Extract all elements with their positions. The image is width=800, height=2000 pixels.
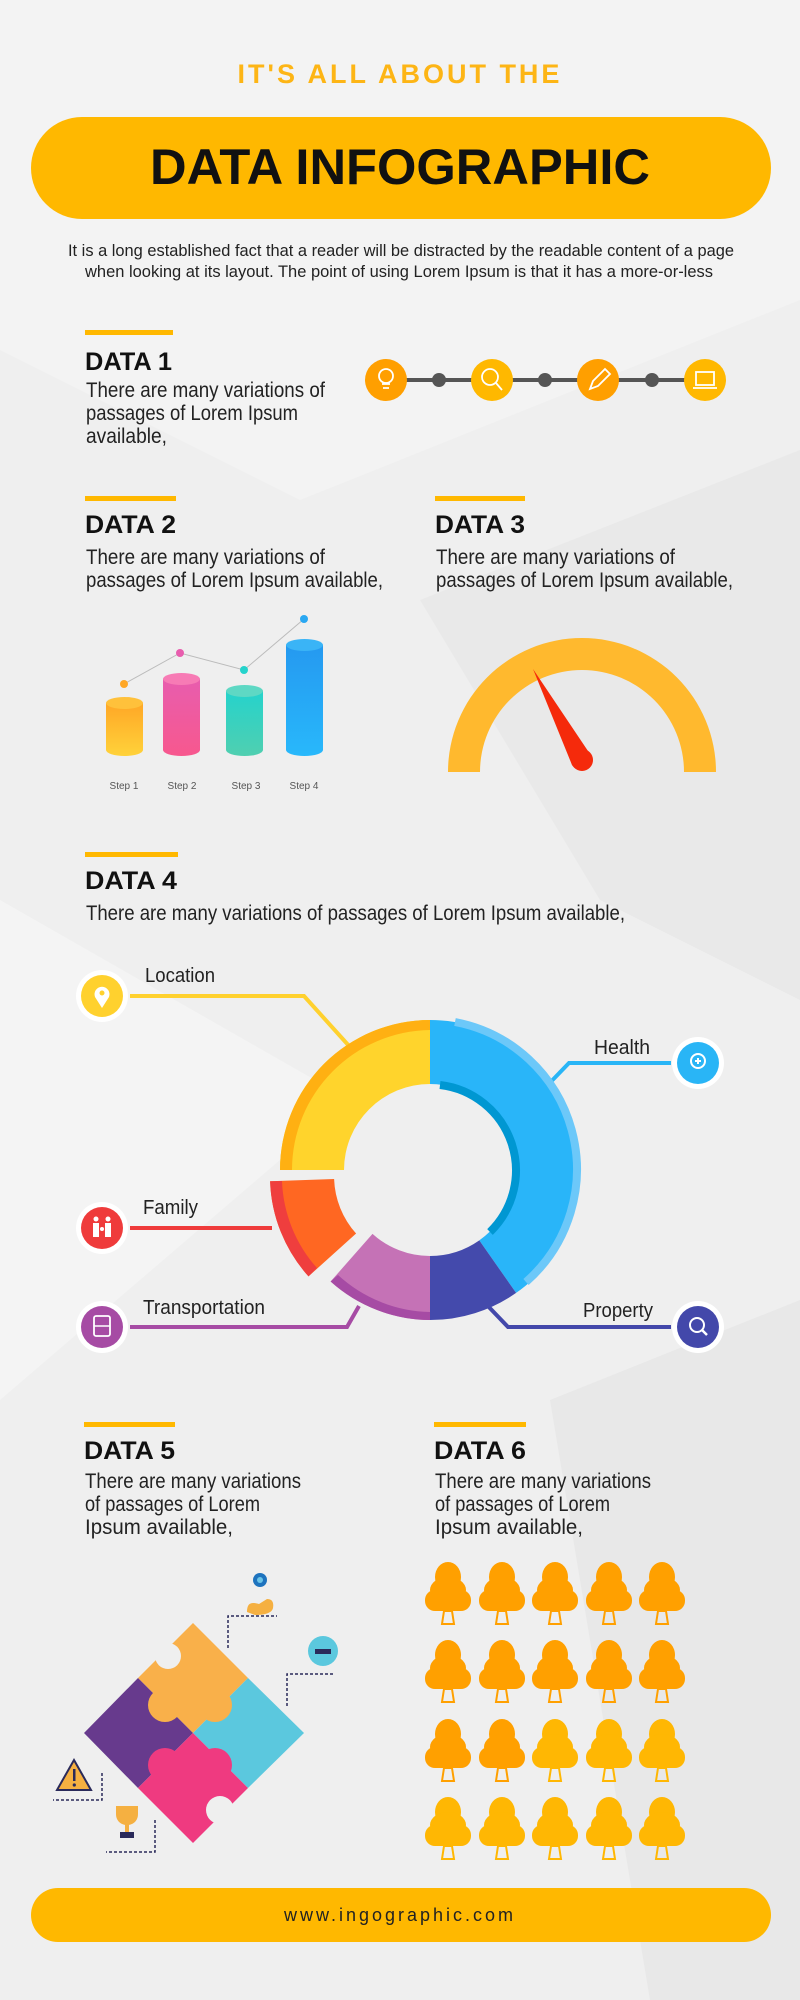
label: transportation <box>76 1297 265 1353</box>
panel: data 3: There are many variations of <box>436 546 675 569</box>
label: health <box>594 1037 724 1089</box>
title banner <box>31 117 771 219</box>
panel: data 2 <box>85 496 383 592</box>
label: family <box>76 1197 198 1254</box>
panel: data 1: There are many variations of <box>86 379 325 402</box>
bar chart: cylinders: Step 3 <box>232 781 261 792</box>
panel: data 6: of passages of Lorem <box>435 1493 610 1516</box>
panel: data 1: passages of Lorem Ipsum <box>86 402 298 425</box>
label: health: Health <box>594 1037 650 1059</box>
intro paragraph: It is a long established fact that a reader will be distracted by the readable content of a page <box>68 241 734 260</box>
panel: data 5: DATA 5 <box>84 1437 175 1465</box>
label: location: Location <box>145 965 215 987</box>
bar chart: cylinders: Step 4 <box>290 781 319 792</box>
label: transportation: Transportation <box>143 1297 265 1319</box>
panel: data 3: DATA 3 <box>435 511 525 539</box>
bar chart: cylinders: Step 2 <box>168 781 197 792</box>
panel: data 1: available, <box>86 425 167 448</box>
label: location <box>76 965 215 1022</box>
panel: data 6: Ipsum available, <box>435 1516 583 1539</box>
intro paragraph: when looking at its layout. The point of using Lorem Ipsum is that it has a more-or-less <box>84 262 713 281</box>
panel: data 2: DATA 2 <box>85 511 176 539</box>
panel: data 4: There are many variations of passages of Lorem Ipsum available, <box>86 902 625 925</box>
label: property: Property <box>583 1300 653 1322</box>
panel: data 6: There are many variations <box>435 1470 651 1493</box>
panel: data 6 <box>434 1422 651 1539</box>
icon: arm <box>247 1573 273 1615</box>
panel: data 3: passages of Lorem Ipsum available, <box>436 569 733 592</box>
panel: data 5: of passages of Lorem <box>85 1493 260 1516</box>
panel: data 1: DATA 1 <box>85 348 172 376</box>
icon: trophy <box>116 1806 138 1838</box>
label: property <box>583 1300 724 1353</box>
panel: data 2: passages of Lorem Ipsum available, <box>86 569 383 592</box>
panel: data 5: Ipsum available, <box>85 1516 233 1539</box>
intro paragraph <box>68 241 734 281</box>
gauge chart <box>448 638 716 772</box>
puzzle diagram <box>53 1573 338 1852</box>
bar chart: cylinders: Step 1 <box>110 781 139 792</box>
panel: data 4 <box>85 852 625 925</box>
icon: minus <box>308 1636 338 1666</box>
panel: data 3 <box>435 496 733 592</box>
title banner: DATA INFOGRAPHIC <box>150 139 650 195</box>
panel: data 5: There are many variations <box>85 1470 301 1493</box>
footer banner: www.ingographic.com <box>283 1905 516 1925</box>
icon timeline <box>365 359 726 401</box>
donut chart <box>76 965 724 1353</box>
panel: data 4: DATA 4 <box>85 867 177 895</box>
footer banner <box>31 1888 771 1942</box>
tree grid <box>425 1562 685 1859</box>
panel: data 2: There are many variations of <box>86 546 325 569</box>
panel: data 6: DATA 6 <box>434 1437 526 1465</box>
icon: warning <box>57 1760 91 1790</box>
label: family: Family <box>143 1197 198 1219</box>
connector lines <box>130 996 671 1327</box>
bar chart: cylinders <box>106 615 323 792</box>
panel: data 5 <box>84 1422 301 1539</box>
panel: data 1 <box>85 330 325 448</box>
subtitle: IT'S ALL ABOUT THE <box>238 59 562 89</box>
